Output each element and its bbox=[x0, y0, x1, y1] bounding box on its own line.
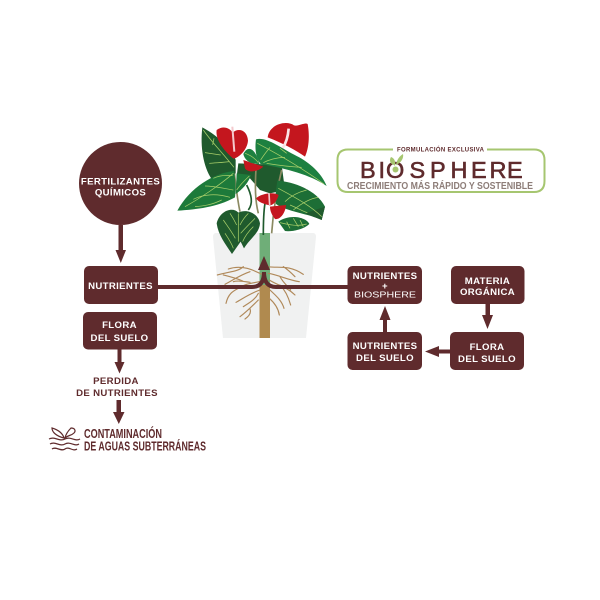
leaf veins bbox=[185, 130, 324, 248]
logo: biosphere: BIOSPHERE bbox=[360, 157, 523, 183]
circle: fertilizantes quimicos bbox=[79, 142, 162, 225]
flower lower bbox=[270, 205, 286, 219]
box: nutrientes + biosphere bbox=[348, 266, 422, 304]
text: perdida de nutrientes bbox=[76, 376, 158, 399]
text: contaminacion de aguas subterraneas: CONTAMINACIÓN bbox=[84, 426, 162, 441]
small bottom right leaf bbox=[278, 217, 309, 231]
box: nutrientes + biosphere: + bbox=[382, 281, 388, 292]
flower middle bbox=[256, 193, 279, 205]
box: materia organica: ORGÁNICA bbox=[460, 286, 515, 298]
box: flora del suelo left bbox=[83, 312, 157, 350]
box: materia organica: MATERIA bbox=[465, 276, 510, 287]
box: flora del suelo left: DEL SUELO bbox=[91, 333, 149, 344]
dark filler foliage bbox=[237, 163, 285, 193]
arrow: materia to flora bbox=[482, 304, 493, 329]
logo: biosphere bbox=[338, 146, 544, 192]
small bright leaf bbox=[243, 149, 259, 164]
box: flora del suelo right bbox=[450, 332, 524, 370]
plant with anthurium flowers bbox=[177, 123, 327, 254]
heart leaf bottom bbox=[217, 210, 260, 254]
arrow: nutrientes del suelo to nutrientes + biosphere bbox=[380, 306, 390, 332]
box: materia organica bbox=[451, 266, 524, 304]
arrow: fertilizantes to nutrientes bbox=[116, 225, 126, 263]
arrow: perdida to contaminacion bbox=[113, 400, 124, 424]
box: nutrientes del suelo bbox=[348, 332, 422, 370]
box: nutrientes del suelo: DEL SUELO bbox=[356, 353, 414, 364]
box: nutrientes bbox=[84, 266, 158, 304]
icon: plant and water waves bbox=[49, 428, 80, 450]
flower small behind bbox=[243, 160, 263, 171]
box: flora del suelo right: FLORA bbox=[470, 342, 504, 353]
box: nutrientes: NUTRIENTES bbox=[88, 281, 153, 292]
dark leaf edge bbox=[305, 207, 325, 220]
circle: fertilizantes quimicos: FERTILIZANTES bbox=[81, 176, 160, 188]
flower right bbox=[268, 123, 309, 157]
connector: nutrientes to root arrow to nutrientes + biosphere bbox=[157, 256, 349, 287]
logo: biosphere: FORMULACIÓN EXCLUSIVA bbox=[397, 146, 485, 154]
logo: biosphere: CRECIMIENTO MÁS RÁPIDO Y SOSTENIBLE bbox=[347, 180, 533, 192]
text: contaminacion de aguas subterraneas: DE AGUAS SUBTERRÁNEAS bbox=[84, 438, 206, 454]
box: flora del suelo left: FLORA bbox=[102, 320, 137, 331]
text: perdida de nutrientes: PERDIDA bbox=[93, 376, 139, 387]
pot with roots and central stem bbox=[213, 233, 316, 338]
stems bbox=[232, 157, 282, 235]
arrow: flora to nutrientes del suelo bbox=[425, 346, 450, 357]
box: flora del suelo right: DEL SUELO bbox=[458, 354, 516, 365]
lower left leaf bbox=[177, 171, 236, 211]
arrow: flora to perdida bbox=[114, 349, 124, 374]
text: perdida de nutrientes: DE NUTRIENTES bbox=[76, 388, 158, 399]
main bright leaf bbox=[255, 139, 327, 186]
circle: fertilizantes quimicos: QUÍMICOS bbox=[95, 186, 146, 198]
right lower leaf bbox=[276, 181, 325, 220]
icon: sprout on the O bbox=[390, 154, 403, 172]
box: nutrientes + biosphere: BIOSPHERE bbox=[354, 290, 416, 300]
dark back leaf, left bbox=[202, 127, 236, 179]
text: contaminacion de aguas subterraneas bbox=[84, 426, 206, 454]
box: nutrientes del suelo: NUTRIENTES bbox=[353, 341, 418, 352]
small middle leaf bbox=[236, 173, 251, 194]
flower left bbox=[216, 127, 248, 159]
box: nutrientes + biosphere: NUTRIENTES bbox=[353, 271, 418, 282]
